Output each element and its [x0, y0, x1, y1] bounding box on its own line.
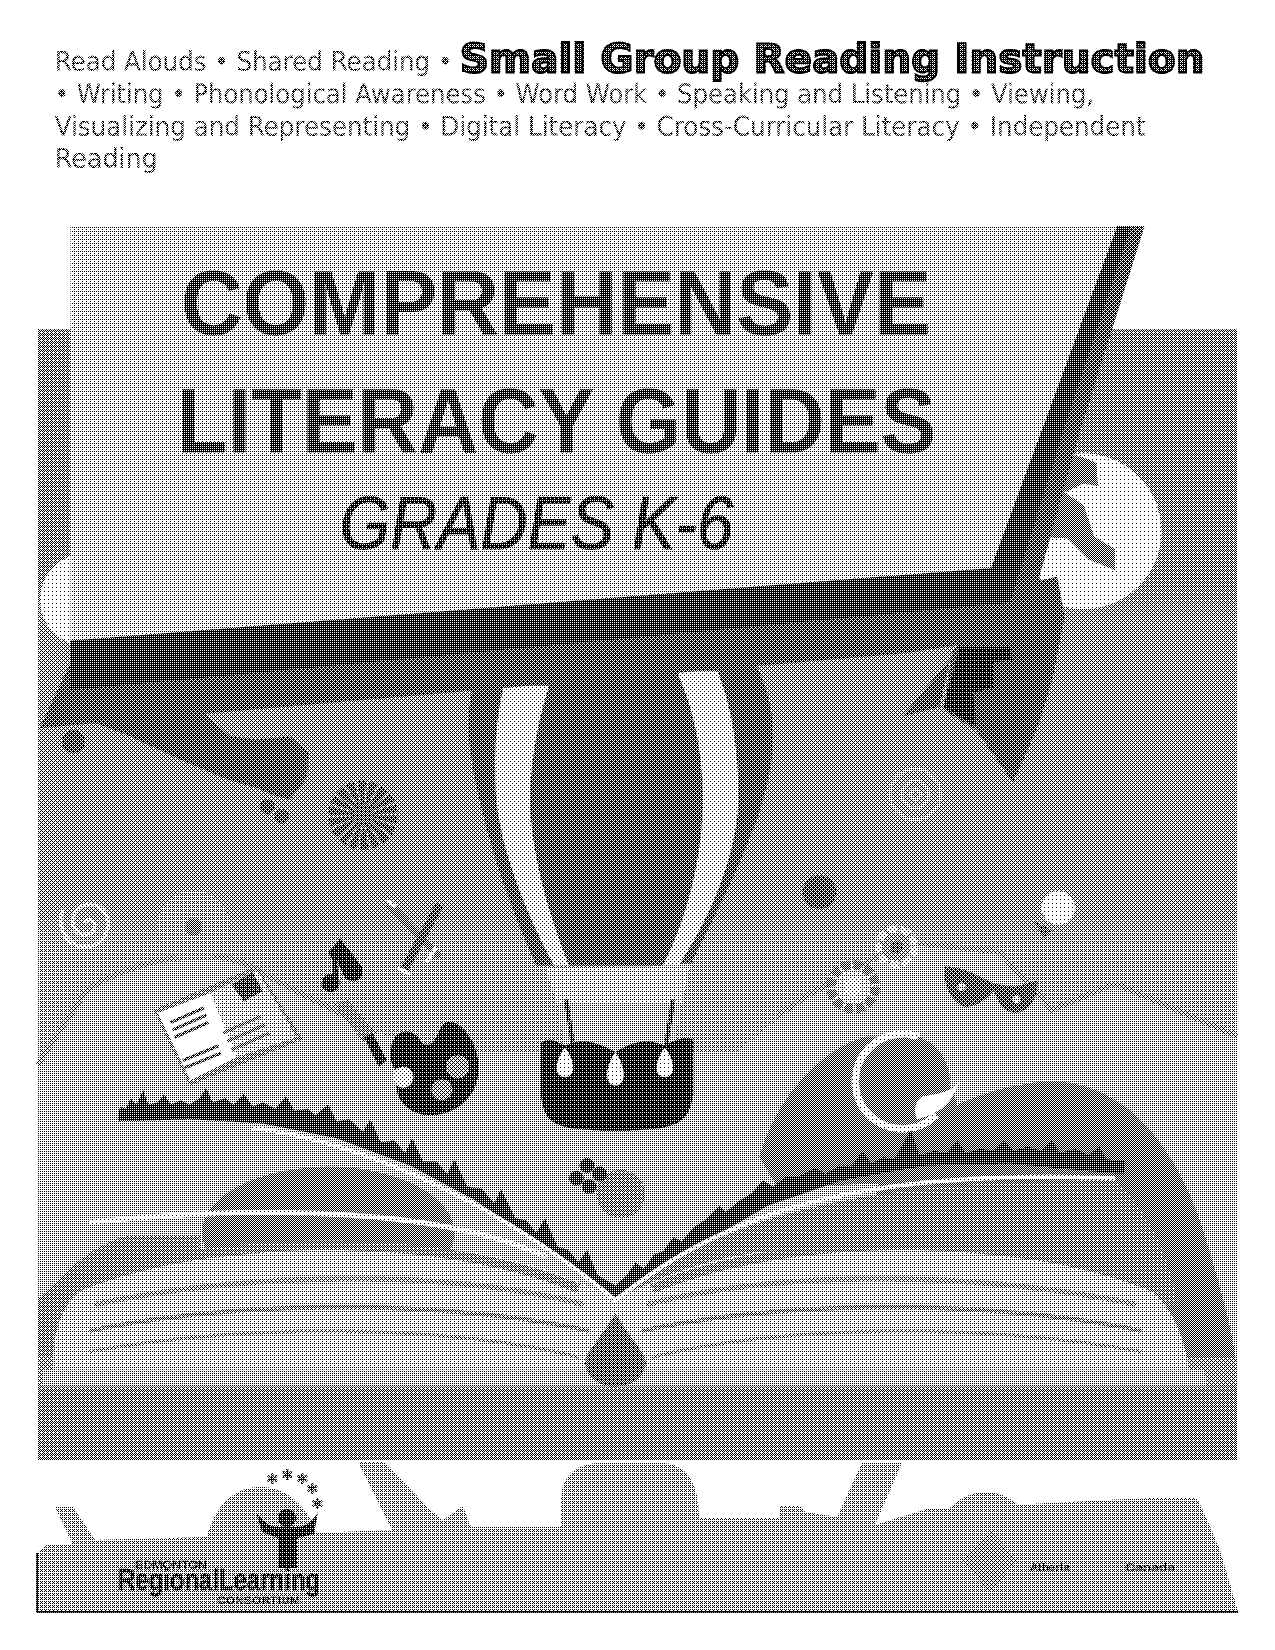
medium shadow band [40, 226, 1145, 728]
logo stars [266, 1467, 324, 1513]
mask icon [944, 967, 1038, 1013]
logo stars: ✱ [281, 1467, 294, 1484]
logo text consortium: CONSORTIUM [217, 1595, 300, 1607]
logo stars: ✱ [306, 1481, 319, 1498]
cover strip [42, 1370, 1208, 1389]
palette icon [391, 1022, 479, 1115]
sunburst icon [342, 794, 384, 836]
balloon ropes [566, 999, 673, 1047]
lower hills background [38, 942, 1237, 1357]
disc with dot [158, 890, 229, 962]
left spiral icon [61, 904, 108, 947]
hill right [842, 1082, 1237, 1368]
header topic list: • Writing • Phonological Awareness • Word Work • Speaking and Listening • Viewing, [55, 80, 1094, 110]
logo text edmonton: EDMONTON [135, 1558, 207, 1572]
lower ground [38, 1387, 1237, 1460]
right page stripes [642, 1245, 1157, 1357]
footer rule [37, 1553, 1238, 1612]
dark dot [803, 875, 836, 909]
logo text regional learning: RegionalLearning [118, 1562, 320, 1597]
heading: small group reading instruction: Small Group Reading Instruction [460, 37, 1205, 83]
globe [1006, 453, 1161, 609]
balloon basket [541, 1038, 693, 1131]
logo stars: ✱ [266, 1471, 279, 1488]
grades subtitle: GRADES K-6 [340, 481, 734, 565]
book base band [38, 1357, 1237, 1389]
hill left of centre right [760, 1036, 959, 1189]
paint brush [335, 999, 387, 1067]
logo figure [256, 1509, 318, 1568]
rocket [903, 576, 1065, 783]
crescent elephant icon [838, 1017, 967, 1146]
plane silhouette [40, 670, 308, 824]
header topic list [55, 37, 1205, 174]
title line 2: LITERACY GUIDES [177, 370, 936, 472]
illustration background [38, 329, 1237, 1262]
label alberta: Alberta [1030, 1562, 1071, 1574]
book pages [53, 1246, 1189, 1370]
white strip above artwork at band top [1113, 226, 1178, 329]
title panel [70, 226, 1117, 641]
far left hill [38, 1236, 200, 1368]
logo: edmonton regional learning consortium [118, 1467, 324, 1607]
right page upper shade [631, 1180, 1178, 1304]
logo stars: ✱ [311, 1496, 324, 1513]
music note icon [322, 938, 363, 992]
header topic list: Visualizing and Representing • Digital Literacy • Cross-Curricular Literacy • Independent [55, 113, 1146, 143]
left page stripes [74, 1213, 589, 1357]
footer skyline band [37, 1462, 1238, 1612]
light dot [1034, 891, 1075, 938]
header topic list: Reading [55, 144, 158, 174]
hot air balloon [468, 631, 773, 1131]
book centre drop [585, 1313, 646, 1387]
right swirl icon [890, 769, 940, 819]
title line 1: COMPREHENSIVE [181, 253, 931, 355]
flower and dot [569, 1158, 645, 1218]
balloon collar [545, 966, 690, 1005]
government logo mark [963, 1530, 1017, 1593]
logo stars: ✱ [296, 1471, 309, 1488]
open book icon [154, 966, 303, 1086]
grass along book edge [118, 1088, 1126, 1298]
gear icons [831, 929, 914, 1009]
left cloud [40, 552, 139, 647]
book page edge highlight [252, 1128, 1115, 1300]
dark shadow band [70, 226, 1131, 690]
header topic list: Read Alouds • Shared Reading • [55, 47, 452, 77]
open book [53, 1213, 1189, 1370]
label canada: Canada [1125, 1562, 1176, 1574]
left dome [202, 1167, 454, 1299]
pencil and ruler icons [387, 900, 440, 974]
